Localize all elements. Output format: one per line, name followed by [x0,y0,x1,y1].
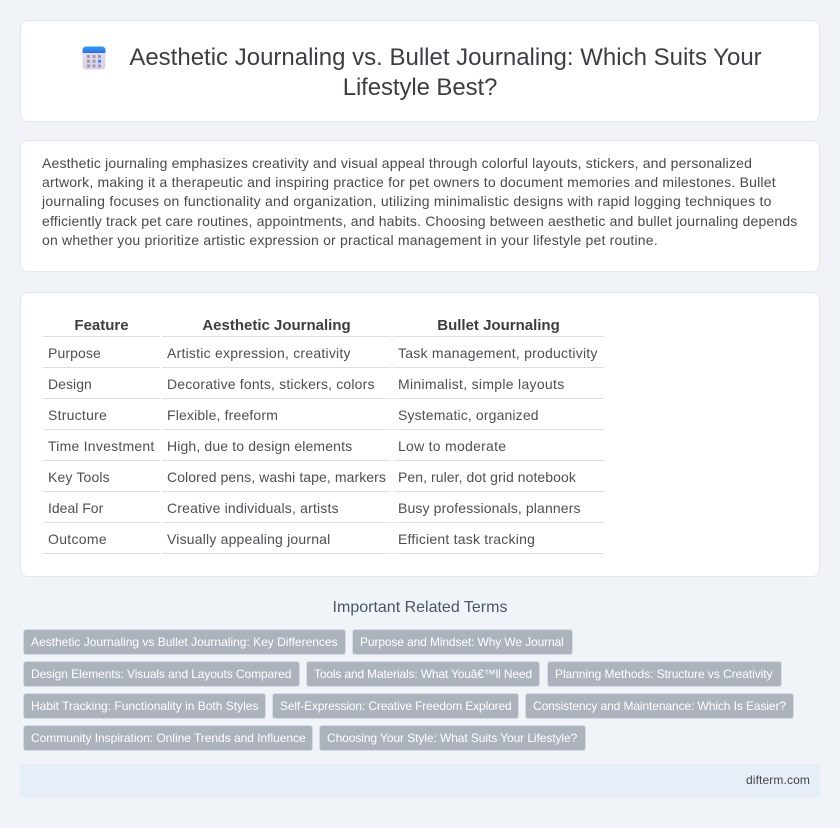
row: purpose: Purpose [48,345,101,361]
related term tags: Design Elements: Visuals and Layouts Compared [31,667,291,681]
row: ideal for: Busy professionals, planners [398,500,581,516]
footer bar [20,764,820,798]
row: design: Design [48,376,92,392]
row: ideal for [48,500,581,516]
table panel [20,292,820,577]
related term tags: Habit Tracking: Functionality in Both Styles [31,699,258,713]
icon: calendar [82,46,106,70]
table header: Aesthetic Journaling [202,317,351,334]
row: time investment: Time Investment [48,438,155,454]
row: ideal for: Creative individuals, artists [167,500,339,516]
row: structure [48,407,539,423]
intro text: Aesthetic journaling emphasizes creativity and visual appeal through colorful layouts, stickers, and personalized [42,154,752,170]
related term tags: Purpose and Mindset: Why We Journal [360,635,564,649]
related term tags: Tools and Materials: What Youâ€™ll Need [314,667,532,681]
intro text: journaling focuses on functionality and organization, utilizing minimalistic designs with rapid logging techniques to [42,193,772,209]
row: structure: Structure [48,407,107,423]
row: key tools: Pen, ruler, dot grid notebook [398,469,576,485]
related term tags: Community Inspiration: Online Trends and Influence [31,731,306,745]
row: ideal for: Ideal For [48,500,103,516]
row: outcome: Efficient task tracking [398,531,535,547]
footer brand: difterm.com [746,773,810,787]
row: purpose: Artistic expression, creativity [167,345,351,361]
intro text [42,154,797,248]
row: structure: Systematic, organized [398,407,539,423]
intro panel [20,140,820,272]
row: time investment [48,438,506,454]
row: outcome: Outcome [48,531,107,547]
row: time investment: High, due to design elements [167,438,352,454]
related term tags: Aesthetic Journaling vs Bullet Journaling: Key Differences [31,635,338,649]
row: structure: Flexible, freeform [167,407,278,423]
row: key tools: Key Tools [48,469,110,485]
row: outcome [48,531,535,547]
related terms heading: Important Related Terms [333,598,507,616]
related term tags: Planning Methods: Structure vs Creativity [555,667,772,681]
table header: Bullet Journaling [437,317,560,334]
title: Lifestyle Best? [343,74,497,101]
row: design: Minimalist, simple layouts [398,376,565,392]
table header: Feature [74,317,129,334]
title: Aesthetic Journaling vs. Bullet Journaling: Which Suits Your [129,44,762,71]
row: key tools [48,469,576,485]
row: design [48,376,565,392]
title [129,44,762,101]
row: purpose: Task management, productivity [398,345,598,361]
row: key tools: Colored pens, washi tape, markers [167,469,386,485]
related term tags [23,629,794,751]
table header [74,317,560,334]
intro text: artwork, making it a therapeutic and inspiring practice for pet owners to document memories and milestones. Bullet [42,174,776,190]
row: design: Decorative fonts, stickers, colors [167,376,375,392]
row: purpose [48,345,598,361]
header panel [20,20,820,122]
row: outcome: Visually appealing journal [167,531,330,547]
intro text: on whether you prioritize artistic expression or practical management in your lifestyle pet routine. [42,232,658,248]
related term tags: Self-Expression: Creative Freedom Explored [280,699,512,713]
row: time investment: Low to moderate [398,438,506,454]
related term tags: Choosing Your Style: What Suits Your Lifestyle? [327,731,577,745]
related term tags: Consistency and Maintenance: Which Is Easier? [533,699,786,713]
intro text: efficiently track pet care routines, appointments, and habits. Choosing between aesthetic and bullet journaling depends [42,213,797,229]
